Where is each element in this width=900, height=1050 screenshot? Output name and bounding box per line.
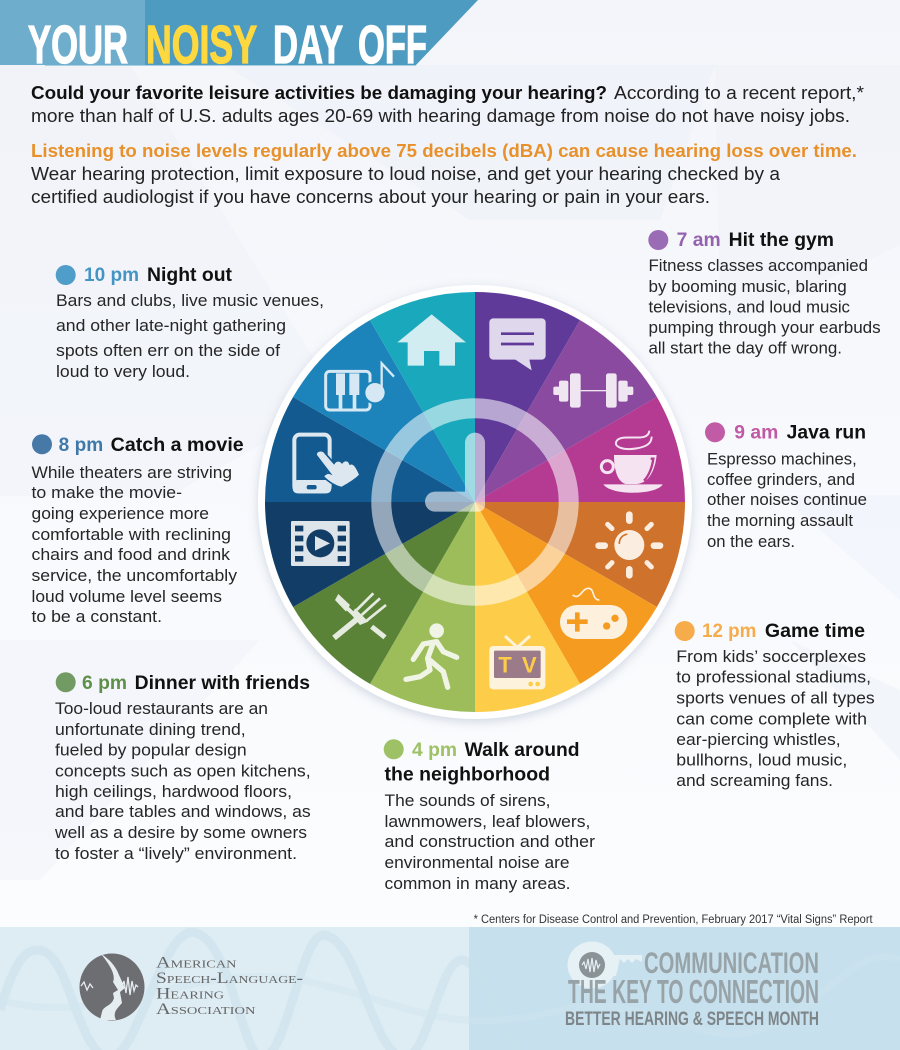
icon: television: TV: [498, 653, 537, 678]
panel: 7 am hit the gym: Fitness classes accompanied: [648, 257, 868, 275]
panel: 7 am hit the gym: all start the day off wrong.: [648, 340, 842, 358]
ASHA logo: [80, 954, 303, 1020]
panel: 9 am java run: coffee grinders, and: [707, 471, 855, 489]
icon: film strip: [291, 521, 350, 566]
campaign text: COMMUNICATION: [644, 947, 819, 980]
panel: 12 pm game time: 12 pm: [702, 621, 756, 642]
panel: 10 pm night out: spots often err on the side of: [56, 342, 280, 360]
panel: 12 pm game time: to professional stadiums,: [676, 668, 871, 686]
intro text: Could your favorite leisure activities be damaging your hearing?: [31, 82, 607, 103]
panel: 4 pm walk around the neighborhood: and construction and other: [384, 833, 596, 851]
panel: 4 pm walk around the neighborhood: The sounds of sirens,: [384, 792, 550, 810]
panel: 9 am java run: other noises continue: [707, 491, 867, 509]
panel: 8 pm catch a movie: 8 pm: [59, 435, 103, 456]
panel: 8 pm catch a movie: loud volume level seems: [32, 588, 222, 606]
panel: 9 am java run: [705, 422, 867, 551]
panel: 9 am java run: Java run: [787, 423, 866, 444]
panel: 10 pm night out: and other late-night gathering: [56, 317, 286, 335]
panel: 4 pm walk around the neighborhood: [384, 739, 596, 893]
panel: 12 pm game time: sports venues of all types: [676, 689, 875, 707]
organization name: [156, 954, 303, 1018]
icon: coffee cup: [601, 431, 663, 493]
panel: 4 pm walk around the neighborhood: the neighborhood: [384, 765, 550, 786]
warning text: certified audiologist if you have concerns about your hearing or pain in your ears.: [31, 186, 710, 207]
panel: 12 pm game time: From kids’ soccerplexes: [676, 648, 866, 666]
panel: 12 pm game time: ear-piercing whistles,: [676, 731, 841, 749]
warning text: Wear hearing protection, limit exposure to loud noise, and get your hearing checked by a: [31, 163, 781, 184]
icon: piano keys and music note: [326, 363, 394, 410]
wheel wedges: [265, 292, 685, 712]
panel: 6 pm dinner with friends: [54, 672, 311, 863]
title text: OFF: [358, 15, 427, 75]
panel: 6 pm dinner with friends: Too-loud restaurants are an: [55, 700, 268, 718]
icon: walking person: [406, 623, 457, 687]
panel: 8 pm catch a movie: While theaters are striving: [32, 464, 232, 482]
footnote: * Centers for Disease Control and Prevention, February 2017 “Vital Signs” Report: [474, 914, 873, 926]
panel: 4 pm walk around the neighborhood: environmental noise are: [384, 854, 570, 872]
panel: 10 pm night out: loud to very loud.: [56, 363, 190, 381]
icon: house: [397, 314, 466, 366]
panel: 9 am java run: 9 am: [734, 423, 778, 444]
panel: 4 pm walk around the neighborhood: common in many areas.: [384, 875, 570, 893]
title banner: [0, 0, 478, 75]
panel: 8 pm catch a movie: going experience more: [32, 505, 209, 523]
panel: 6 pm dinner with friends: to foster a “lively” environment.: [55, 845, 297, 863]
intro text: According to a recent report,*: [614, 82, 864, 103]
title text: [28, 15, 427, 75]
panel: 8 pm catch a movie: to make the movie-: [32, 484, 182, 502]
icon: sun: [599, 515, 660, 575]
panel: 6 pm dinner with friends: concepts such as open kitchens,: [55, 763, 311, 781]
clock wheel: [258, 285, 692, 722]
panel: 7 am hit the gym: 7 am: [677, 230, 721, 251]
panel: 7 am hit the gym: televisions, and loud music: [648, 299, 850, 317]
panel: 6 pm dinner with friends: and bare tables and windows, as: [55, 803, 311, 821]
icon: dumbbell: [553, 373, 633, 408]
panel: 8 pm catch a movie: [32, 434, 244, 626]
panel: 6 pm dinner with friends: Dinner with friends: [135, 673, 310, 694]
panel: 9 am java run: Espresso machines,: [707, 450, 857, 468]
panel: 10 pm night out: Bars and clubs, live music venues,: [56, 292, 324, 310]
panel: 9 am java run: the morning assault: [707, 512, 853, 530]
panel: 6 pm dinner with friends: high ceilings, hardwood floors,: [55, 783, 292, 801]
panel: 12 pm game time: [675, 621, 875, 790]
panel: 7 am hit the gym: [648, 230, 881, 358]
panel: 9 am java run: on the ears.: [707, 533, 795, 551]
panel: 12 pm game time: Game time: [765, 621, 865, 642]
intro text: more than half of U.S. adults ages 20-69 with hearing damage from noise do not have noisy jobs.: [31, 105, 850, 126]
title text: DAY: [273, 15, 343, 75]
panel: 8 pm catch a movie: chairs and food and drink: [32, 546, 231, 564]
icon: game controller: [560, 588, 627, 639]
panel: 6 pm dinner with friends: well as a desire by some owners: [54, 824, 307, 842]
panel: 8 pm catch a movie: service, the uncomfortably: [32, 567, 238, 585]
panel: 10 pm night out: 10 pm: [84, 265, 139, 286]
clock hands: [425, 433, 485, 512]
organization name: American: [156, 954, 237, 971]
panel: 12 pm game time: and screaming fans.: [676, 772, 833, 790]
panel: 8 pm catch a movie: comfortable with reclining: [32, 526, 231, 544]
intro text: [31, 82, 864, 126]
panel: 4 pm walk around the neighborhood: 4 pm: [412, 740, 457, 761]
warning text: [31, 140, 857, 207]
icon: phone with pointing hand: [293, 435, 360, 493]
icon: television: [489, 636, 545, 689]
footer band: [0, 927, 900, 1050]
panel: 4 pm walk around the neighborhood: Walk around: [465, 740, 580, 761]
panel: 4 pm walk around the neighborhood: lawnmowers, leaf blowers,: [384, 813, 590, 831]
title text: NOISY: [146, 15, 257, 75]
panel: 7 am hit the gym: Hit the gym: [729, 230, 834, 251]
panel: 8 pm catch a movie: Catch a movie: [111, 435, 244, 456]
panel: 12 pm game time: bullhorns, loud music,: [676, 751, 847, 769]
campaign text: [565, 947, 819, 1030]
panel: 12 pm game time: can come complete with: [676, 710, 867, 728]
title text: YOUR: [28, 15, 128, 75]
icon: fork and knife: [334, 593, 386, 638]
panel: 7 am hit the gym: pumping through your earbuds: [648, 319, 881, 337]
warning text: Listening to noise levels regularly above 75 decibels (dBA) can cause hearing loss over time.: [31, 140, 857, 161]
icon: speech bubble: [489, 318, 546, 370]
panel: 8 pm catch a movie: to be a constant.: [32, 608, 162, 626]
organization name: Hearing: [156, 986, 224, 1003]
panel: 6 pm dinner with friends: fueled by popular design: [55, 742, 247, 760]
clock ring: [381, 408, 569, 596]
key logo: [565, 942, 819, 1030]
panel: 10 pm night out: [56, 265, 324, 381]
panel: 6 pm dinner with friends: unfortunate dining trend,: [55, 721, 246, 739]
panel: 6 pm dinner with friends: 6 pm: [82, 673, 127, 694]
panel: 7 am hit the gym: by booming music, blaring: [648, 278, 847, 296]
panel: 10 pm night out: Night out: [147, 265, 233, 286]
icon: key: [568, 942, 642, 988]
organization name: Speech-Language-: [156, 970, 303, 987]
organization name: Association: [156, 1001, 256, 1018]
